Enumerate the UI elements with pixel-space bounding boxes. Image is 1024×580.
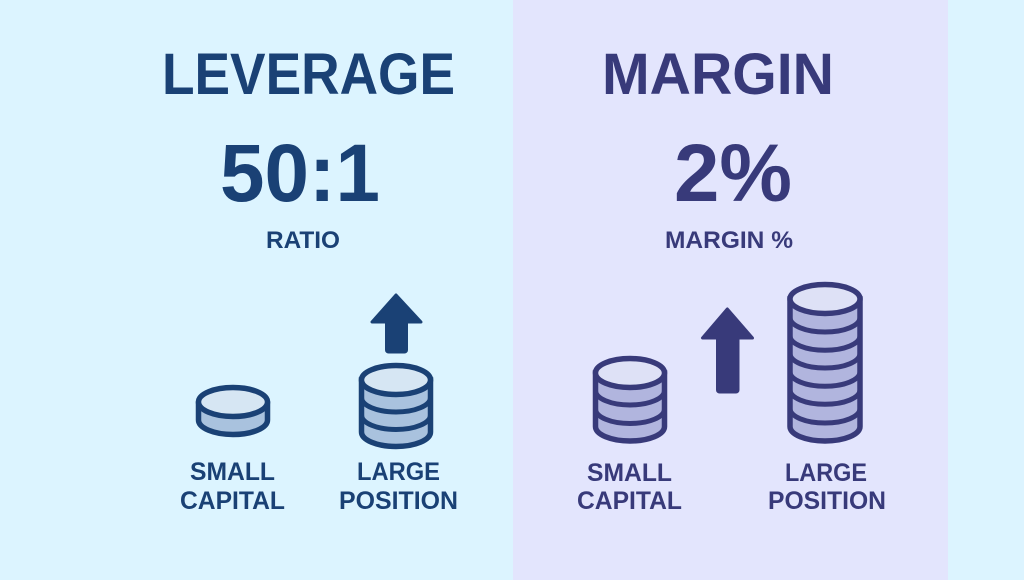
label: large position: LARGE xyxy=(357,458,440,486)
label: ratio: RATIO xyxy=(266,227,340,254)
stat: 50:1: 50:1 xyxy=(220,128,380,219)
icon: small capital coin stack xyxy=(596,358,664,441)
heading: leverage: LEVERAGE xyxy=(162,42,455,107)
label: small capital xyxy=(180,458,285,515)
heading: margin: MARGIN xyxy=(602,42,834,107)
label: small capital: SMALL xyxy=(587,459,672,487)
panel: leverage xyxy=(0,0,513,580)
label: small capital: CAPITAL xyxy=(180,487,285,515)
stat: 2%: 2% xyxy=(674,128,792,219)
icon: large position coin stack xyxy=(362,366,430,446)
label: large position xyxy=(339,458,458,515)
icon: small capital coin xyxy=(198,388,268,434)
arrow: up xyxy=(702,309,752,392)
label: small capital: SMALL xyxy=(190,458,275,486)
icon: large position coin stack xyxy=(790,284,860,441)
label: large position: POSITION xyxy=(768,487,886,515)
label: large position: LARGE xyxy=(785,459,867,487)
label: margin percent: MARGIN % xyxy=(665,227,793,254)
panel: margin xyxy=(513,0,948,580)
label: large position xyxy=(768,459,886,515)
label: small capital xyxy=(577,459,682,515)
arrow: up xyxy=(372,295,421,352)
label: small capital: CAPITAL xyxy=(577,487,682,515)
label: large position: POSITION xyxy=(339,487,458,515)
